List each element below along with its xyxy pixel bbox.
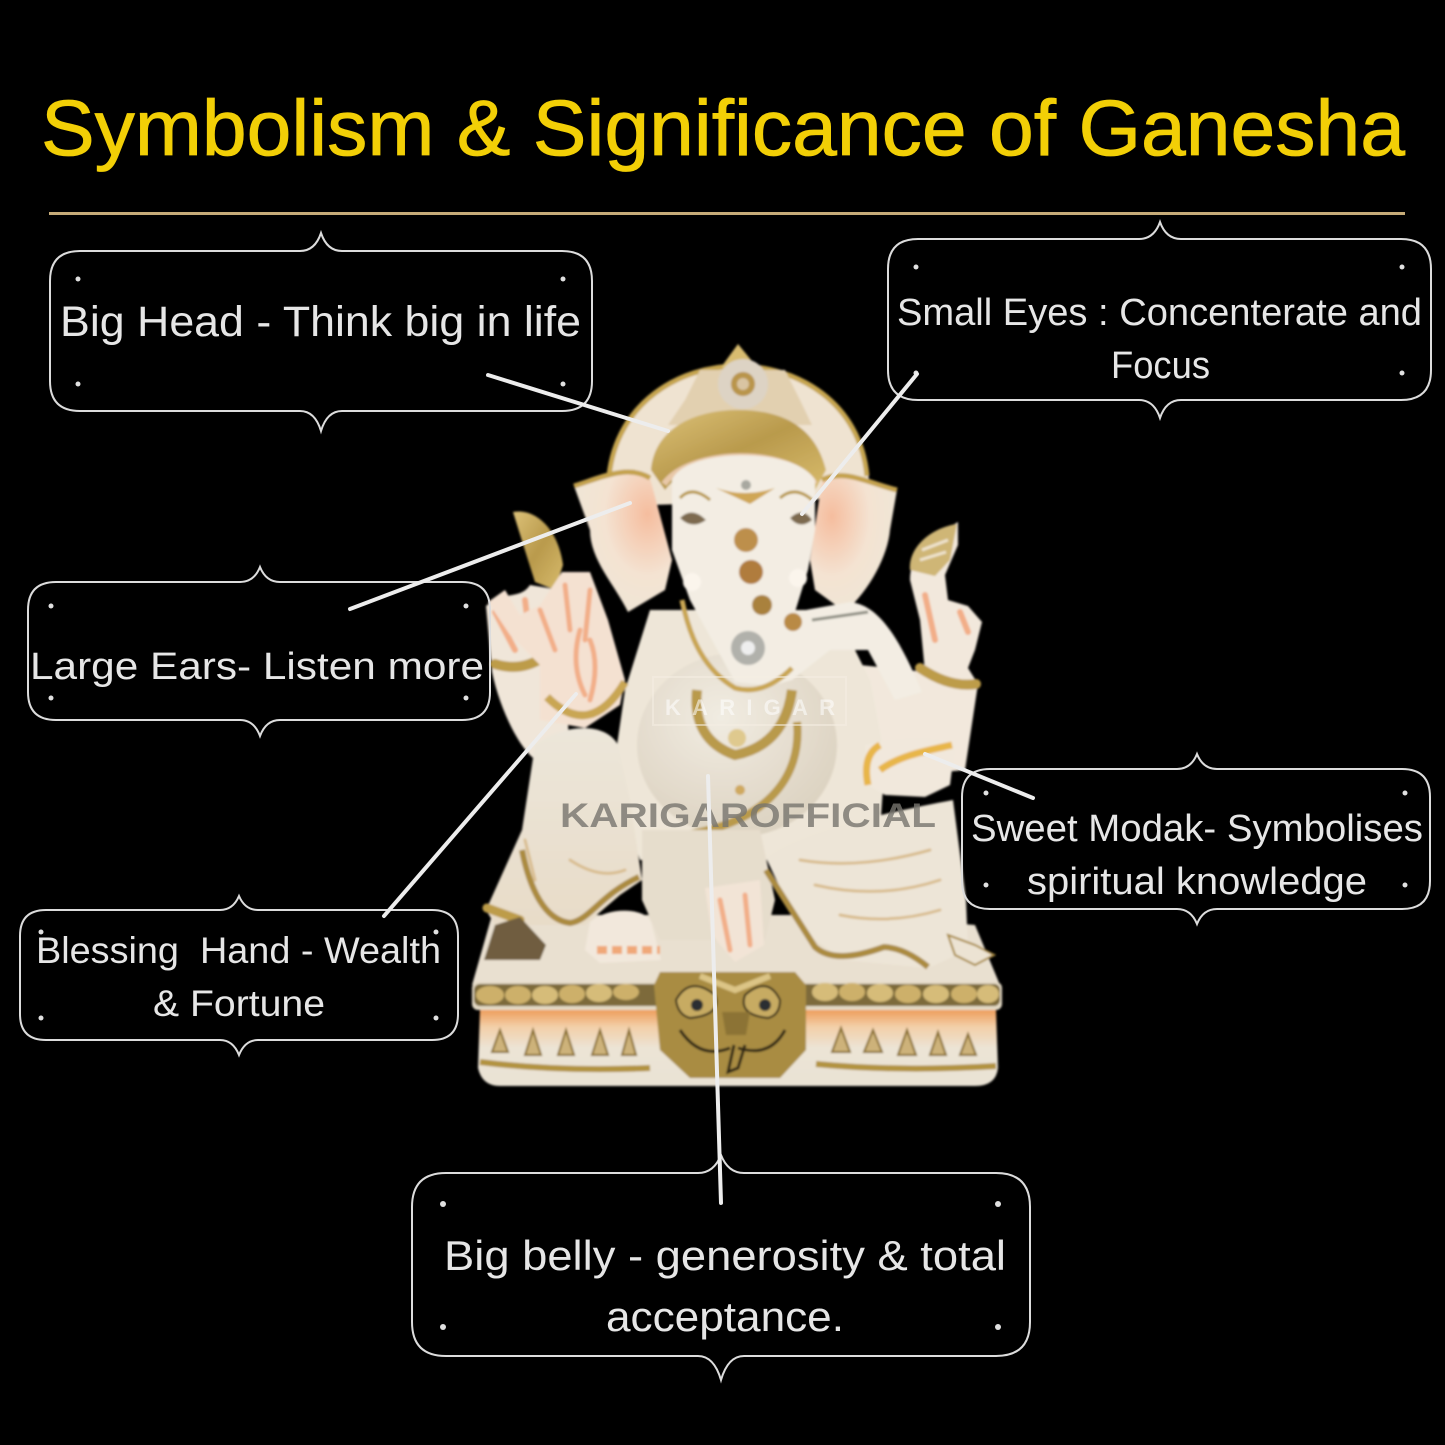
callout: blessing hand: Blessing Hand - Wealth (36, 930, 441, 971)
statue: marble Ganesha figure (472, 344, 1002, 1086)
callout: sweet modak: spiritual knowledge (1027, 861, 1367, 903)
callout: big belly: Big belly - generosity & total (444, 1232, 1006, 1279)
watermark: KARIGAR stamp (653, 677, 846, 725)
statue: necklace (662, 690, 797, 838)
callout: big belly: acceptance. (606, 1293, 844, 1340)
statue: rear left arm with conch (486, 511, 570, 770)
statue: legs and feet (484, 728, 994, 968)
base: lion face (654, 972, 806, 1078)
callout: small eyes (888, 222, 1431, 418)
callout: large ears: Large Ears- Listen more (30, 646, 484, 688)
watermark: KARIGAR stamp: KARIGAR (665, 695, 835, 720)
statue: marble base (472, 915, 1002, 1086)
callout: small eyes: Focus (1111, 345, 1210, 387)
watermark: KARIGAROFFICIAL (560, 797, 936, 835)
statue: blessing hand (488, 572, 625, 728)
statue: ears (574, 472, 897, 612)
callout: big head: Big Head - Think big in life (60, 298, 581, 346)
callout: big head (50, 233, 592, 431)
callout: small eyes: Small Eyes : Concenterate and (897, 292, 1422, 334)
callout: sweet modak: Sweet Modak- Symbolises (971, 808, 1423, 850)
callout: big belly (412, 1155, 1030, 1380)
callout: blessing hand: & Fortune (153, 983, 325, 1024)
callout: large ears (28, 567, 490, 736)
title: Symbolism & Significance of Ganesha (41, 83, 1405, 172)
statue: head and trunk (672, 455, 922, 700)
statue: crown halo (607, 344, 869, 505)
callout: sweet modak (962, 754, 1430, 924)
pointer lines (350, 374, 1033, 1203)
statue: torso and belly (612, 610, 885, 860)
callout: blessing hand (20, 896, 458, 1055)
statue: rear right arm with conch (860, 522, 982, 780)
